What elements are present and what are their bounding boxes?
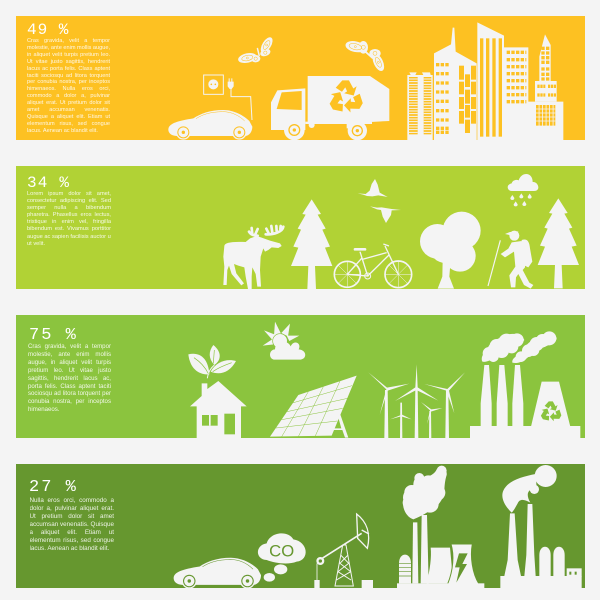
text block: lime panel: Lorem ipsum dolor sit amet, — [27, 191, 111, 197]
icon: CO cloud — [258, 533, 306, 582]
icon: CO cloud: CO — [269, 541, 294, 560]
text block: yellow panel: per conubia nostra, per inceptos — [27, 79, 110, 85]
text block: yellow panel: lacus. Aenean ac blandit elit. — [27, 128, 98, 134]
icon: bird lower — [370, 206, 401, 223]
text block: dark green panel: Nulla eros orci, commodo a — [30, 496, 114, 504]
icon: oil pump jack — [314, 514, 373, 588]
icon: moose — [223, 226, 283, 289]
text block: green panel: augue, in aliquet velit turpis — [28, 359, 111, 366]
icon: butterfly left — [237, 35, 275, 65]
text block: yellow panel: Quisque a aliquet elit. Etiam ut — [27, 114, 110, 120]
icon: round tree — [420, 212, 481, 289]
illustration: green panel left — [188, 322, 357, 440]
icon: house — [190, 381, 247, 440]
icon: butterfly right — [344, 39, 387, 73]
icon: wind turbines — [368, 364, 465, 439]
icon: smoke clouds — [482, 331, 557, 363]
text block: yellow panel: aliquet erat. Ut pretium dolor sit — [27, 100, 110, 106]
text block: yellow panel: taciti sociosqu ad litora torquent — [27, 73, 110, 79]
icon: bird upper — [358, 179, 388, 197]
text block: lime panel: tristique in enim vel, fringilla — [27, 219, 111, 225]
text block: dark green panel: Ut pretium dolor sit amet — [30, 513, 114, 520]
icon: pine tree — [538, 198, 579, 288]
icon: leaves — [188, 345, 236, 378]
text block: green panel: molestie, ante enim mollis — [28, 351, 111, 358]
text block: lime panel: augue ac sapien facilisis auctor ut — [27, 234, 111, 240]
text block: green panel: Cras gravida, velit a tempor — [28, 343, 111, 350]
text block: dark green panel — [30, 496, 114, 552]
text block: yellow panel: Cras gravida, velit a tempor — [27, 38, 110, 44]
icon: car — [174, 558, 261, 589]
text block: yellow panel: amet accumsan venenatis. — [27, 107, 110, 113]
text block: dark green panel: elementum risus, sed congue — [30, 537, 114, 544]
text block: dark green panel: accumsan venenatis. Quisque — [30, 521, 114, 528]
heading: 34 %: 34 % — [27, 174, 70, 192]
icon: hiker — [488, 231, 533, 289]
text block: lime panel: bibendum est. Vivamus porttitor — [27, 226, 111, 232]
text block: green panel: himenaeos. — [28, 406, 60, 413]
text block: green panel: porta felis. Class aptent taciti — [28, 383, 111, 390]
panel: lime — [16, 166, 585, 289]
text block: yellow panel: in aliquet velit turpis pretium leo. — [27, 52, 110, 58]
text block: yellow panel: commodo a dolor a, pulvinar — [27, 93, 110, 99]
icon: smoke cloud right — [502, 465, 557, 513]
panel: yellow — [16, 16, 585, 140]
text block: yellow panel: molestie, ante enim mollis augue, — [27, 45, 110, 51]
icon: pine tree — [291, 199, 332, 289]
text block: green panel: sociosqu ad litora torquent per — [28, 390, 111, 397]
panel: dark green — [16, 464, 585, 588]
text block: green panel: sagittis, hendrerit lacus ac, — [28, 375, 111, 382]
text block: yellow panel: lacus ac porta felis. Class aptent — [27, 66, 110, 72]
text block: lime panel: consectetur adipiscing elit. Sed — [27, 198, 111, 204]
icon: sun and cloud — [263, 322, 305, 360]
illustration: green panel right — [368, 331, 580, 439]
text block: dark green panel: lacus. Aenean ac blandit elit. — [30, 545, 109, 552]
icon: recycling truck — [271, 76, 389, 140]
text block: yellow panel: Ut vitae justo sagittis, hendrerit — [27, 59, 110, 65]
icon: power plant — [397, 515, 484, 588]
icon: bicycle — [334, 244, 412, 288]
icon: rain cloud — [508, 174, 538, 206]
text block: dark green panel: dolor a, pulvinar aliquet erat. — [30, 505, 114, 512]
icon: factory right — [500, 504, 582, 588]
illustration: dark green panel left — [174, 514, 373, 589]
text block: green panel: pretium leo. Ut vitae justo — [28, 367, 111, 374]
illustration: lime panel scene — [223, 179, 412, 289]
text block: yellow panel: himenaeos. Nulla eros orci, — [27, 86, 110, 92]
icon: cooling tower with recycling mark — [531, 382, 570, 427]
icon: smoke stacks — [470, 365, 580, 439]
illustration: yellow panel scene — [168, 35, 389, 140]
illustration: city skyline — [407, 22, 563, 140]
heading: 27 %: 27 % — [29, 478, 78, 497]
text block: yellow panel — [27, 38, 110, 134]
icon: smoke cloud left — [403, 466, 447, 519]
icon: solar panel — [270, 376, 357, 438]
heading: 49 %: 49 % — [27, 21, 69, 39]
heading: 75 %: 75 % — [29, 326, 78, 345]
text block: green panel — [28, 343, 111, 413]
text block: lime panel: semper nulla a bibendum — [27, 205, 111, 211]
text block: dark green panel: a aliquet elit. Etiam ut — [30, 529, 114, 536]
icon: power outlet and cable — [204, 75, 252, 120]
text block: lime panel: pharetra. Phasellus eros lectus, — [27, 212, 111, 218]
text block: lime panel — [27, 191, 111, 247]
text block: lime panel: ut velit. — [27, 241, 45, 247]
icon: electric car — [168, 110, 252, 140]
text block: yellow panel: elementum risus, sed congue — [27, 121, 110, 127]
text block: green panel: conubia nostra, per inceptos — [28, 398, 111, 405]
illustration: lime panel scene right — [420, 174, 579, 289]
illustration: dark green panel right — [397, 465, 582, 588]
panel: green — [16, 315, 585, 438]
